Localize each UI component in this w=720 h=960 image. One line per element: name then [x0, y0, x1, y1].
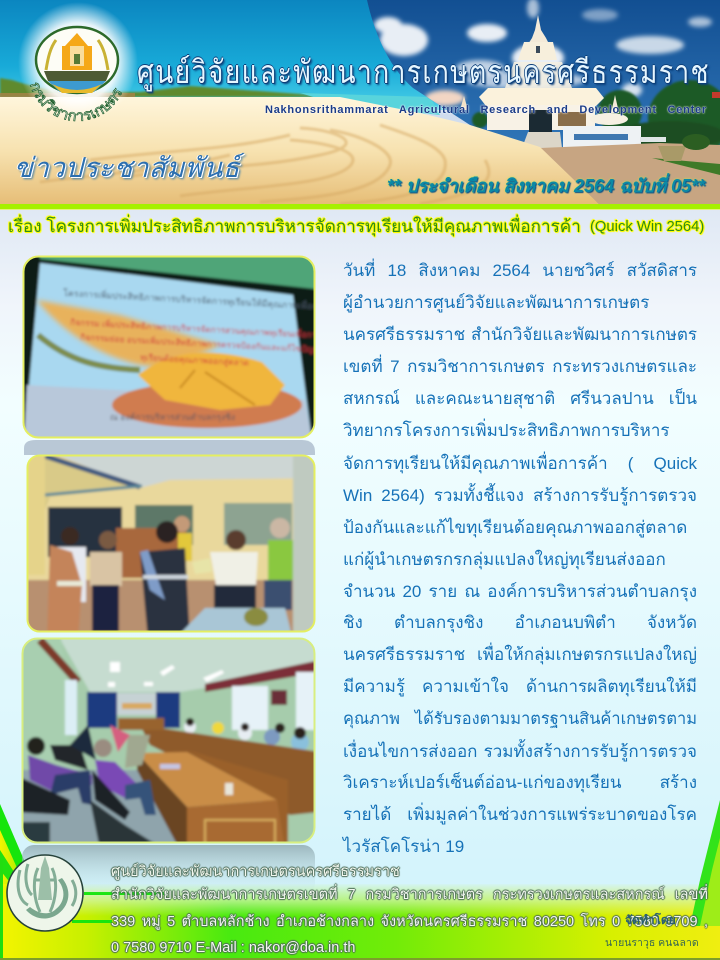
- plaza: [540, 143, 720, 205]
- photo: meeting room: [15, 630, 320, 850]
- header banner: [0, 0, 720, 210]
- story title strip: (Quick Win 2564): [590, 219, 704, 235]
- trees: [470, 78, 720, 145]
- article text: จำนวน 20 ราย ณ องค์การบริหารส่วนตำบลกรุง: [343, 582, 697, 601]
- sand: [0, 97, 600, 205]
- article text: แก่ผู้นำเกษตรกรกลุ่มแปลงใหญ่ทุเรียนส่งออก: [343, 550, 666, 569]
- article text: วิทยากรโครงการเพิ่มประสิทธิภาพการบริหาร: [343, 421, 670, 440]
- logo: department of agriculture: กรมวิชาการเกษตร: [30, 82, 122, 122]
- footer contact block: [110, 862, 708, 956]
- heading: public relations news: ข่าวประชาสัมพันธ์: [14, 152, 240, 183]
- sand ripples: [40, 125, 489, 204]
- article text: วิเคราะห์เปอร์เซ็นต์อ่อน-แก่ของทุเรียน สร้าง: [343, 773, 697, 792]
- logo: department of agriculture: [19, 3, 137, 122]
- right photo: sky and temple: [360, 0, 720, 210]
- footer contact block: สำนักวิจัยและพัฒนาการเกษตรเขตที่ 7 กรมวิชาการเกษตร กระทรวงเกษตรและสหกรณ์ เลขที่: [111, 887, 708, 903]
- article text: นครศรีธรรมราช สำนักวิจัยและพัฒนาการเกษตร: [343, 325, 697, 344]
- article text: สหกรณ์ และคณะนายสุชาติ ศรีนวลปาน เป็น: [343, 389, 697, 408]
- seal: naga emblem: [7, 855, 83, 931]
- audience near side: [27, 737, 45, 755]
- story title strip: เรื่อง โครงการเพิ่มประสิทธิภาพการบริหารจัดการทุเรียนให้มีคุณภาพเพื่อการค้า: [8, 217, 581, 236]
- divider lines: [0, 204, 720, 209]
- tables: [140, 725, 320, 815]
- issue line: ** ประจำเดือน สิงหาคม 2564 ฉบับที่ 05**: [387, 176, 705, 196]
- photo: projector slide: กิจกรรมย่อย อบรมเพิ่มประสิทธิภาพการตรวจป้องกันและแก้ไขปัญหา: [80, 331, 324, 355]
- temple: [460, 15, 666, 148]
- photo: projector slide: โครงการเพิ่มประสิทธิภาพการบริหารจัดการทุเรียนให้มีคุณภาพเพื่อการค้า: [63, 287, 338, 313]
- article text: ชิง ตำบลกรุงชิง อำเภอนบพิตำ จังหวัด: [343, 613, 697, 632]
- article text: วันที่ 18 สิงหาคม 2564 นายชวิศร์ สวัสดิสาร: [343, 261, 697, 280]
- subtitle: center name in English: Nakhonsrithammarat Agricultural Research and Development Center: [265, 104, 707, 116]
- article text: เงื่อนไขการส่งออก รวมทั้งสร้างการรับรู้การตรวจ: [343, 742, 697, 761]
- article text: ป้องกันและแก้ไขทุเรียนด้อยคุณภาพออกสู่ตลาด: [343, 518, 687, 537]
- article text: คุณภาพ ได้รับรองตามมาตรฐานสินค้าเกษตรตาม: [343, 710, 697, 728]
- article text: ไวรัสโคโรน่า 19: [343, 837, 464, 856]
- article text: จัดการทุเรียนให้มีคุณภาพเพื่อการค้า ( Quick: [343, 454, 697, 473]
- audience far side: [184, 721, 309, 751]
- article text: มีความรู้ ความเข้าใจ ด้านการผลิตทุเรียนให้มี: [343, 677, 697, 696]
- author credit: นายนราวุธ คนฉลาด: [605, 937, 699, 949]
- footer contact block: ศูนย์วิจัยและพัฒนาการเกษตรนครศรีธรรมราช: [111, 864, 400, 880]
- author credit: จัดทำโดย: [625, 913, 676, 927]
- article text: Win 2564) รวมทั้งชี้แจง สร้างการรับรู้การตรวจ: [343, 486, 697, 505]
- footer contact block: 339 หมู่ 5 ตำบลหลักช้าง อำเภอช้างกลาง จังหวัดนครศรีธรรมราช 80250 โทร 0 7580 9709 ,: [111, 914, 708, 930]
- reflections below photos: [22, 440, 315, 895]
- story title strip: [8, 212, 706, 238]
- photo: projector slide: ทุเรียนด้อยคุณภาพออกสู่ตลาด: [140, 352, 249, 369]
- article text: นครศรีธรรมราช เพื่อให้กลุ่มเกษตรกรแปลงใหญ่: [343, 645, 697, 664]
- photo: projector slide: [22, 256, 316, 438]
- article text: รายได้ เพิ่มมูลค่าในช่วงการแพร่ระบาดของโรค: [343, 805, 697, 824]
- photo: durian inspection group: [20, 450, 320, 640]
- bottom green background: [0, 800, 720, 960]
- article text: ผู้อำนวยการศูนย์วิจัยและพัฒนาการเกษตร: [343, 293, 649, 312]
- photo: projector slide: ณ องค์การบริหารส่วนตำบลกรุงชิง: [110, 412, 235, 423]
- author credit: [605, 912, 699, 949]
- title: center name in Thai: ศูนย์วิจัยและพัฒนาการเกษตรนครศรีธรรมราช: [137, 54, 710, 90]
- footer contact block: 0 7580 9710 E-Mail : nakor@doa.in.th: [111, 940, 355, 956]
- photo: projector slide: กิจกรรม เพิ่มประสิทธิภาพการบริหารจัดการสวนคุณภาพทุเรียนเพื่อการค้า: [70, 316, 331, 342]
- article text: เขตที่ 7 กรมวิชาการเกษตร กระทรวงเกษตรและ: [343, 357, 697, 376]
